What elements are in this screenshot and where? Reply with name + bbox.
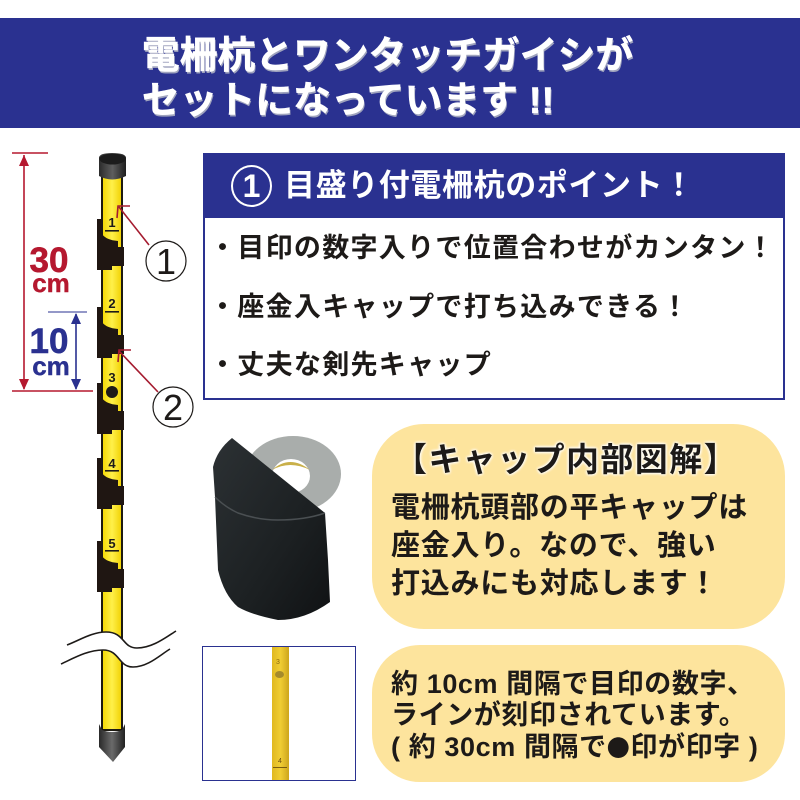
callout 2 <box>118 350 193 428</box>
marking note text <box>391 669 758 763</box>
break mark <box>61 631 176 667</box>
black cap half <box>213 438 330 620</box>
bullet 2: ・座金入キャップで打ち込みできる！ <box>209 292 690 322</box>
panel heading bar <box>205 155 783 218</box>
scale mark 4: 4 <box>108 456 116 471</box>
heading text: 目盛り付電柵杭のポイント！ <box>284 168 695 203</box>
panel: cap diagram note <box>372 424 785 629</box>
bullet 3: ・丈夫な剣先キャップ <box>209 350 492 380</box>
30cm dimension: cm <box>32 268 70 298</box>
10cm dimension <box>30 312 87 390</box>
engraved 4 and line <box>273 757 287 768</box>
header title: セットになっています !! <box>142 79 554 121</box>
scale mark 4 <box>105 456 119 472</box>
30cm dimension <box>12 153 93 391</box>
scale mark 2 <box>105 296 119 313</box>
callout 1 <box>117 206 186 282</box>
scale mark 2: 2 <box>108 296 116 311</box>
scale mark 1 <box>105 215 119 232</box>
scale mark 3 with dot: 3 <box>108 370 116 385</box>
header title <box>142 34 634 121</box>
note body: 電柵杭頭部の平キャップは <box>391 492 748 524</box>
pole tip <box>99 724 125 762</box>
10cm dimension: cm <box>32 351 70 381</box>
cap top face edge <box>215 497 325 520</box>
heading number badge: 1 <box>243 168 260 204</box>
pole diagram <box>12 152 194 762</box>
photo frame: engraved pole <box>202 646 356 781</box>
engraved dot <box>275 671 284 678</box>
note body: 座金入り。なので、強い <box>391 530 717 562</box>
clip 1 <box>97 219 124 270</box>
header banner <box>0 18 800 128</box>
engraved 4 and line: 4 <box>278 758 282 765</box>
washer <box>245 436 341 512</box>
note heading: 【キャップ内部図解】 <box>394 441 738 478</box>
pole top cap <box>99 153 126 180</box>
clip 4 <box>97 458 124 509</box>
clip 2 <box>97 307 124 358</box>
callout 1: 1 <box>156 241 176 282</box>
marking note text: ( 約 30cm 間隔で●印が印字 ) <box>391 729 758 763</box>
note body: 打込みにも対応します！ <box>391 568 718 600</box>
header title: 電柵杭とワンタッチガイシが <box>142 34 633 76</box>
engraved 3: 3 <box>276 659 280 666</box>
pole shaft <box>102 175 122 730</box>
scale mark 3 with dot <box>106 370 118 398</box>
callout 2: 2 <box>163 387 183 428</box>
bullet 1: ・目印の数字入りで位置合わせがカンタン！ <box>209 233 775 263</box>
marking note text: 約 10cm 間隔で目印の数字、 <box>391 669 755 699</box>
scale mark 5: 5 <box>108 536 116 551</box>
panel: marking note <box>372 645 785 782</box>
scale mark 1: 1 <box>108 215 116 230</box>
panel: pole points <box>203 153 785 400</box>
scale mark 5 <box>105 536 119 552</box>
photo: cap with washer <box>213 436 341 620</box>
clip 5 <box>97 541 124 592</box>
10cm dimension: 10 <box>30 322 68 361</box>
marking note text: ラインが刻印されています。 <box>391 700 746 730</box>
heading number badge <box>231 165 272 207</box>
clip 3 <box>97 383 124 434</box>
engraved pole photo <box>272 647 289 780</box>
30cm dimension: 30 <box>30 241 68 280</box>
note body <box>391 492 748 600</box>
